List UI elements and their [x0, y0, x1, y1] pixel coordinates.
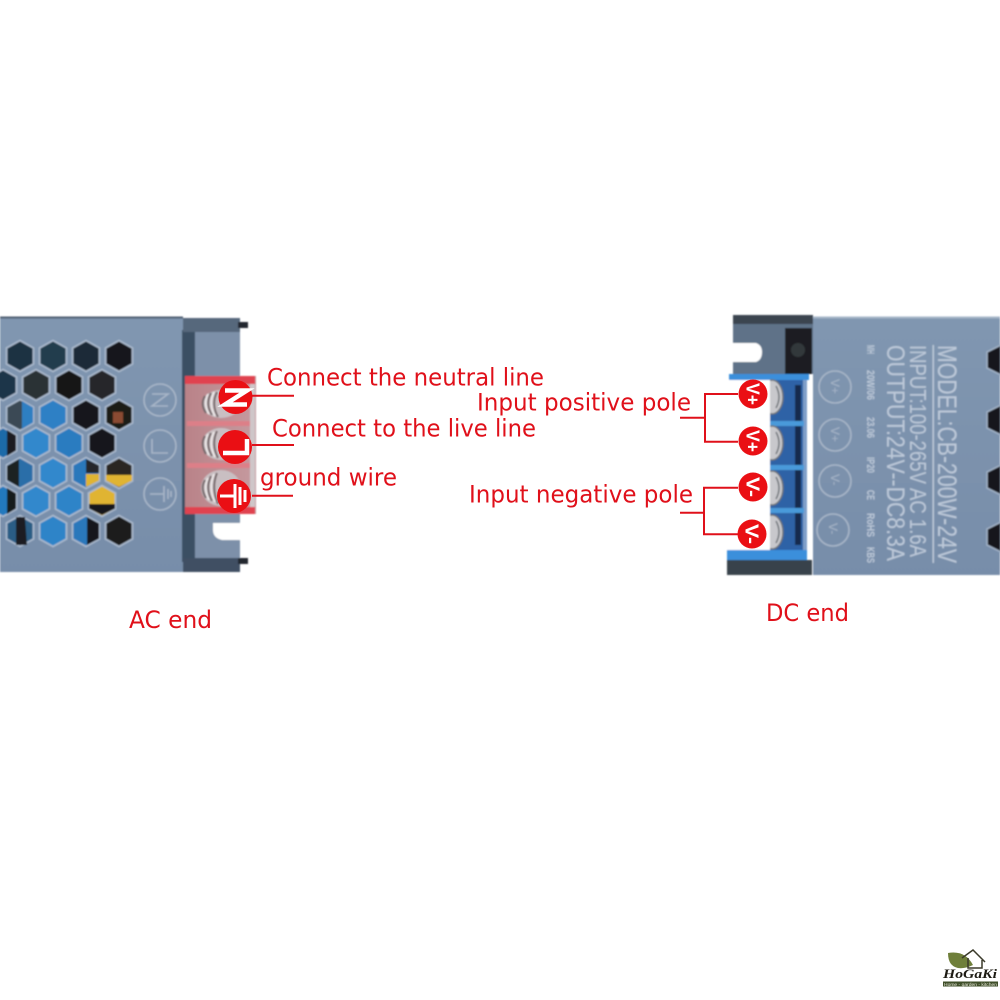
panel: DC end power supply	[727, 315, 1000, 575]
printed specifications: 23.06	[864, 417, 876, 438]
engraved pole symbols: V-	[826, 523, 840, 534]
printed specifications	[864, 345, 962, 563]
logo: HoGaKi: HoGaKi	[942, 966, 997, 981]
badge: V+ top: V+	[742, 383, 762, 405]
badge: L terminal	[218, 430, 252, 464]
badge: V+ second	[738, 426, 768, 456]
label: neutral line: Connect the neutral line	[267, 364, 544, 392]
faceplate: DC end	[813, 318, 1000, 575]
label: DC end: DC end	[766, 599, 849, 627]
printed specifications: 20W/06	[864, 370, 876, 400]
ventilation hexagons: AC end	[0, 340, 132, 546]
faceplate: AC end	[0, 318, 183, 572]
badge: V+ second: V+	[742, 430, 762, 452]
badge: N terminal	[218, 380, 252, 414]
terminal screws: AC end	[201, 390, 241, 506]
leader lines: AC end	[252, 396, 294, 496]
badge: V- first	[738, 472, 768, 502]
label: AC end: AC end	[129, 606, 212, 634]
terminal screws: DC end	[761, 380, 783, 549]
printed specifications: MH	[864, 345, 876, 354]
badge: V- second: V-	[742, 524, 762, 544]
hexagon detail shading	[7, 401, 132, 545]
badge: V- first: V-	[742, 477, 762, 497]
ventilation hexagons: DC end	[987, 345, 1000, 552]
printed specifications: IP20	[864, 457, 876, 473]
terminal block: AC end	[185, 376, 256, 514]
logo: HoGaKi	[942, 950, 998, 987]
end cap: AC end	[183, 318, 240, 572]
bracket: negative pole	[680, 488, 738, 534]
label: positive pole: Input positive pole	[477, 389, 691, 417]
terminal block: DC end	[770, 378, 806, 550]
end cap: DC end	[733, 315, 813, 374]
engraved pole symbols	[817, 371, 851, 546]
label: negative pole: Input negative pole	[469, 481, 693, 509]
printed specifications: RoHS	[864, 513, 876, 537]
bracket: positive pole	[680, 394, 738, 442]
badge: ground terminal	[217, 479, 251, 513]
printed specifications: CE	[864, 490, 876, 500]
printed specifications: MODEL:CB-200W-24V	[932, 345, 962, 563]
logo: HoGaKi: Home - garden - kitchen	[944, 982, 998, 987]
printed specifications: OUTPUT:24V--DC8.3A	[881, 345, 909, 561]
panel: AC end power supply	[0, 316, 256, 572]
badge: V- second	[738, 520, 766, 548]
printed specifications: INPUT:100-265V AC 1.6A	[905, 345, 931, 558]
engraved N, L, ground symbols	[144, 384, 176, 510]
engraved pole symbols: V+	[828, 427, 842, 442]
badge: V+ top	[738, 380, 768, 408]
printed specifications: KBS	[864, 547, 876, 563]
engraved pole symbols: V-	[828, 474, 842, 485]
label: live line: Connect to the live line	[272, 414, 536, 442]
label: ground wire: ground wire	[260, 464, 397, 492]
engraved pole symbols: V+	[828, 379, 842, 394]
